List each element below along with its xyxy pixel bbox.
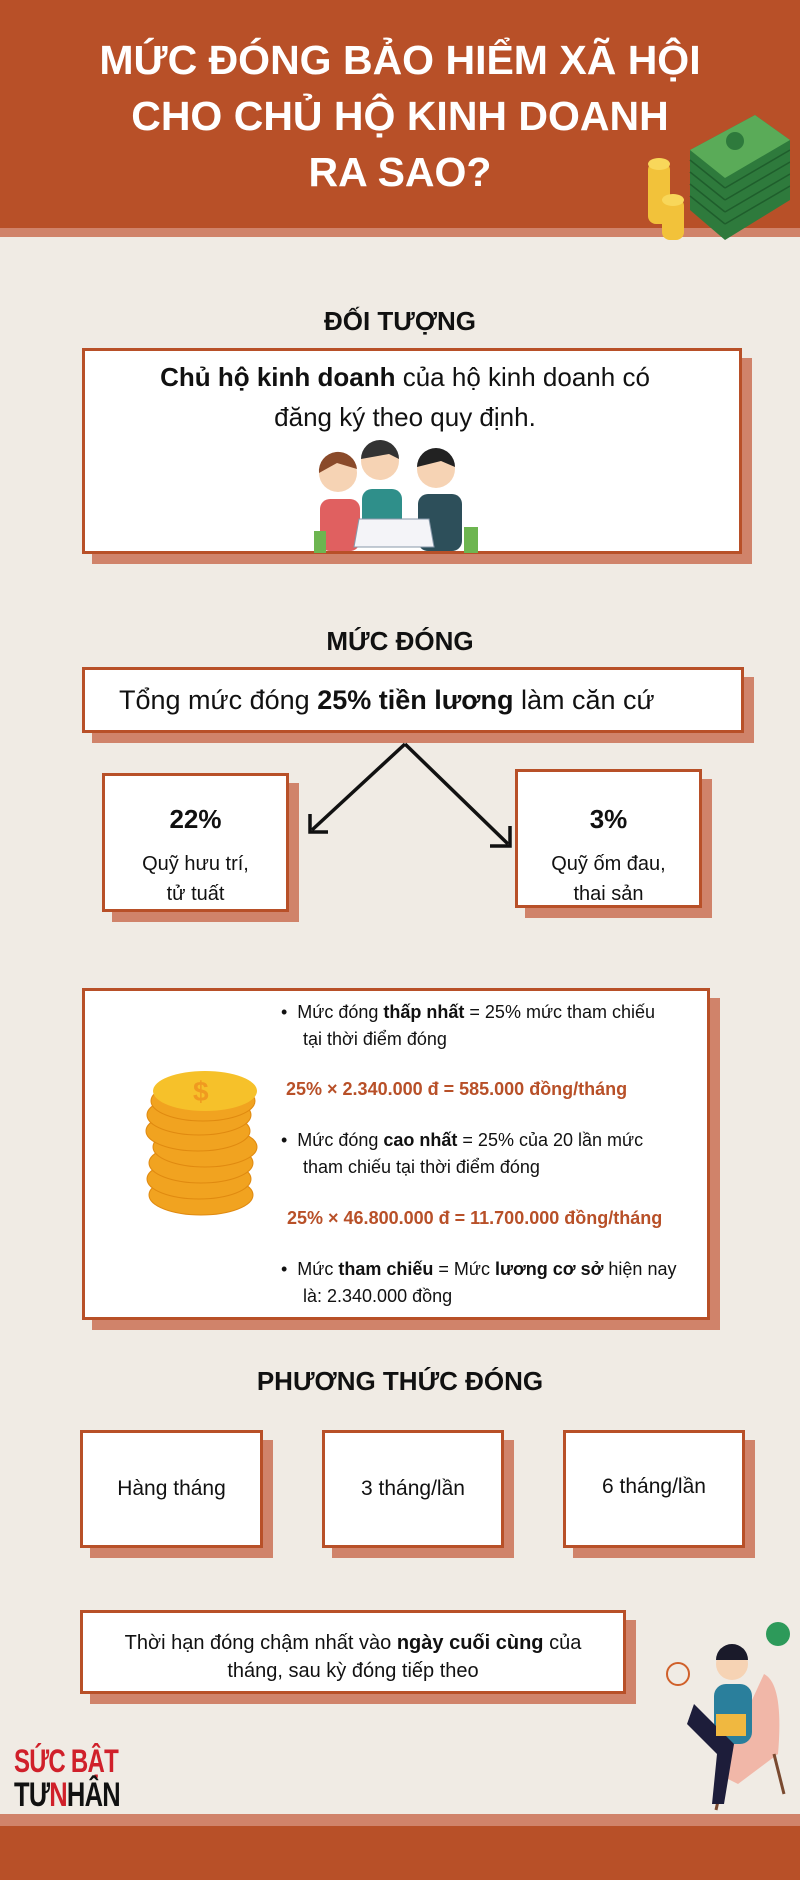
text: bullets: tham chiếu tại thời điểm đóng (303, 1157, 540, 1177)
panel: hàng tháng (80, 1430, 263, 1548)
panel: thời hạn: tháng, sau kỳ đóng tiếp theo (227, 1660, 479, 1682)
panel: thời hạn: Thời hạn đóng chậm nhất vào ngày cuối cùng của (125, 1632, 581, 1654)
arrows (308, 742, 512, 848)
title: CHO CHỦ HỘ KINH DOANH (131, 93, 669, 139)
logo: SỨC BẬT (14, 1743, 118, 1779)
text: bullets: • Mức đóng cao nhất = 25% của 20 lần mức (281, 1130, 643, 1150)
panel: 22%: 22% (169, 804, 222, 834)
text: bullets (281, 1002, 676, 1306)
title: RA SAO? (308, 149, 491, 195)
panel: 3%: thai sản (573, 883, 644, 905)
icon: money stack (648, 115, 790, 240)
panel: 3%: Quỹ ốm đau, (551, 853, 666, 875)
panel: 6 tháng (563, 1430, 745, 1548)
heading: mức đóng: MỨC ĐÓNG (326, 626, 474, 656)
header band (0, 0, 800, 237)
logo (14, 1743, 120, 1814)
panel: 6 tháng: 6 tháng/lần (602, 1475, 706, 1498)
panel: 3%: 3% (590, 804, 627, 834)
panel: tổng mức đóng: Tổng mức đóng 25% tiền lương làm căn cứ (119, 685, 655, 715)
heading: phương thức đóng: PHƯƠNG THỨC ĐÓNG (257, 1366, 543, 1396)
heading: đối tượng: ĐỐI TƯỢNG (324, 306, 476, 336)
illustration: person in chair (666, 1622, 790, 1810)
panel: mức đóng chi tiết (82, 988, 710, 1320)
panel: 3% (515, 769, 702, 908)
text: bullets: là: 2.340.000 đồng (303, 1286, 452, 1306)
title (99, 37, 701, 195)
footer band (0, 1814, 800, 1880)
panel: đối tượng (82, 348, 742, 554)
panel: 22% (102, 773, 289, 912)
panel: 3 tháng (322, 1430, 504, 1548)
text block: Chủ hộ kinh doanh của hộ kinh doanh có (160, 362, 650, 392)
panel: thời hạn (80, 1610, 626, 1694)
text block (160, 362, 650, 432)
panel: hàng tháng: Hàng tháng (117, 1477, 226, 1500)
text block: đăng ký theo quy định. (274, 402, 536, 432)
panel: tổng mức đóng (82, 667, 744, 733)
panel: 22%: tử tuất (167, 883, 224, 905)
icon: people (314, 440, 478, 553)
text: bullets: 25% × 2.340.000 đ = 585.000 đồng/tháng (286, 1079, 627, 1099)
icon: coin stack (146, 1071, 258, 1216)
title: MỨC ĐÓNG BẢO HIỂM XÃ HỘI (99, 37, 701, 83)
text: bullets: tại thời điểm đóng (303, 1029, 447, 1049)
text: bullets: 25% × 46.800.000 đ = 11.700.000 đồng/tháng (287, 1208, 662, 1228)
text: bullets: • Mức đóng thấp nhất = 25% mức tham chiếu (281, 1002, 655, 1022)
panel: 22%: Quỹ hưu trí, (142, 853, 249, 875)
panel: 3 tháng: 3 tháng/lần (361, 1477, 465, 1500)
icon: coin stack: $ (193, 1076, 209, 1107)
logo: TƯNHÂN (14, 1776, 120, 1814)
text: bullets: • Mức tham chiếu = Mức lương cơ sở hiện nay (281, 1259, 676, 1279)
